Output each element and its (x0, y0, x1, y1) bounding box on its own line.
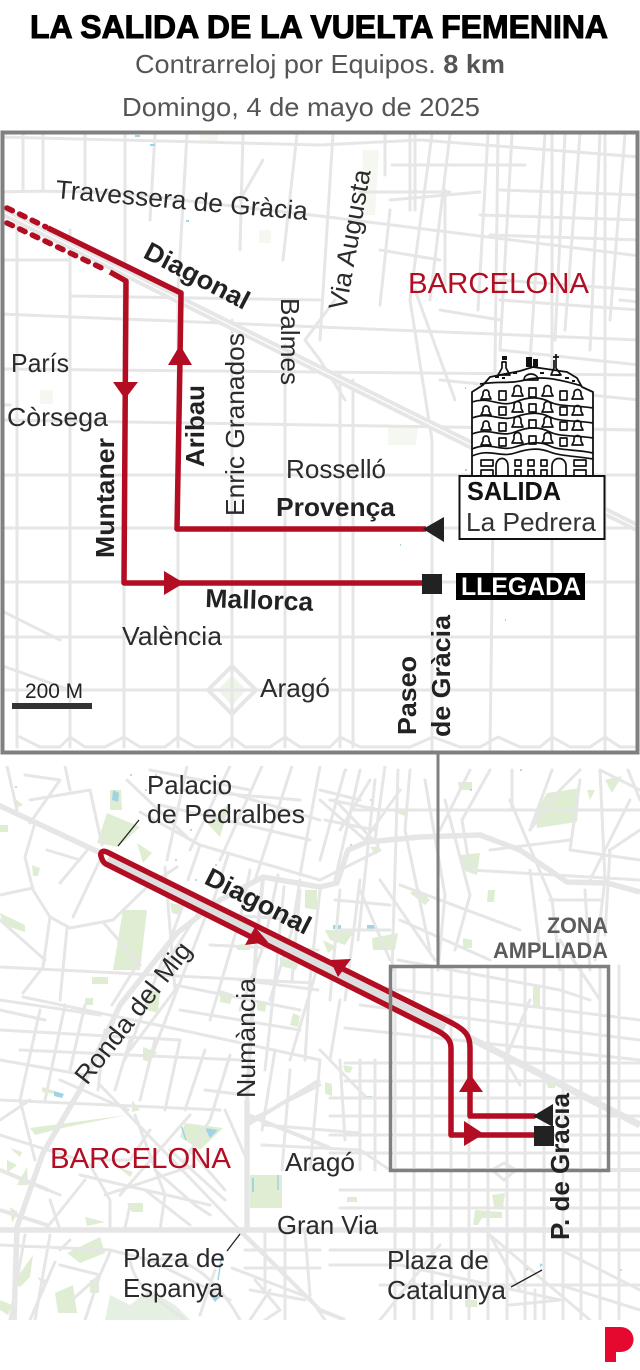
street labels: zoomed map: Provença (276, 492, 396, 522)
frame: zoomed map border (2, 132, 638, 752)
icon: finish square (422, 574, 442, 594)
arrow: Aribau direction (459, 1074, 483, 1092)
street labels: zoomed map: de Gràcia (426, 614, 456, 737)
street labels: zoomed map: Muntaner (90, 438, 120, 558)
arrow: return direction (330, 959, 351, 977)
arrow: Muntaner direction (113, 382, 138, 396)
arrow: start direction (533, 1104, 553, 1127)
street labels: overview map: Catalunya (387, 1275, 507, 1305)
route: return via Muntaner (7, 223, 442, 595)
arrow: Mallorca direction (164, 571, 180, 595)
street labels: overview map: Aragó (285, 1147, 355, 1177)
street labels: zoomed map: Mallorca (205, 583, 314, 617)
logo: P (605, 1327, 634, 1362)
callout: start La Pedrera (460, 476, 604, 539)
street labels: overview map: Palacio (147, 770, 232, 800)
arrow: Aribau direction (168, 349, 192, 365)
label: ZONA AMPLIADA: ZONA (547, 913, 608, 938)
route: overview loop (101, 851, 554, 1146)
street labels: zoomed map: Paseo (392, 656, 422, 735)
street labels: zoomed map: Aribau (180, 385, 210, 467)
map: street network (0, 766, 640, 1320)
panel: overview map (0, 753, 640, 1320)
scale bar: 200 m: 200 M (25, 680, 83, 703)
arrow: Mallorca direction (464, 1121, 484, 1146)
title: LA SALIDA DE LA VUELTA FEMENINA (30, 9, 608, 45)
street labels: zoomed map: BARCELONA (408, 268, 590, 300)
callout: finish LLEGADA: LLEGADA (461, 573, 581, 601)
street labels: zoomed map: València (122, 621, 223, 651)
street labels: overview map: de Pedralbes (147, 799, 305, 829)
street labels: overview map: P. de Gràcia (545, 1092, 575, 1240)
street labels: overview map: BARCELONA (50, 1143, 232, 1175)
arrow: start direction (423, 517, 444, 542)
street labels: zoomed map (7, 166, 590, 737)
street labels: zoomed map: Balmes (275, 298, 305, 385)
scale bar: 200 m (12, 680, 92, 709)
connector: zoom lines (436, 753, 440, 966)
street labels: zoomed map: Enric Granados (220, 333, 250, 516)
street labels: zoomed map: París (11, 348, 69, 378)
frame: zoomed area locator (390, 966, 608, 1170)
panel: zoomed route map (0, 132, 640, 753)
street labels: zoomed map: Rosselló (286, 454, 386, 484)
icon: La Pedrera building (472, 354, 593, 476)
street labels: zoomed map: Travessera de Gràcia (54, 174, 310, 226)
label: ZONA AMPLIADA (493, 913, 608, 963)
map: parks and water (0, 770, 638, 1320)
street labels: overview map: Gran Via (277, 1210, 379, 1240)
street labels: zoomed map: Còrsega (7, 402, 109, 432)
subtitle: date: Domingo, 4 de mayo de 2025 (122, 92, 480, 122)
street labels: overview map: Numància (231, 977, 261, 1098)
label: ZONA AMPLIADA: AMPLIADA (493, 938, 608, 963)
street labels: overview map: Ronda del Mig (68, 936, 198, 1090)
callout: start La Pedrera: SALIDA (467, 476, 561, 506)
street labels: zoomed map: Diagonal (139, 236, 255, 315)
street labels: overview map: Espanya (123, 1273, 224, 1303)
street labels: overview map (50, 770, 575, 1305)
callout: start La Pedrera: La Pedrera (466, 507, 597, 537)
subtitle: stage type and distance: Contrarreloj por Equipos. 8 km (135, 49, 505, 79)
arrow: outbound direction (245, 927, 268, 945)
route: exit via Aribau (7, 208, 444, 542)
street labels: zoomed map: Via Augusta (322, 166, 377, 312)
icon: finish square (534, 1126, 554, 1146)
street labels: overview map: Diagonal (200, 862, 316, 941)
map: zoomed street network (0, 132, 640, 753)
street labels: zoomed map: Aragó (260, 673, 330, 703)
street labels: overview map: Plaza de (387, 1245, 489, 1275)
street labels: overview map: Plaza de (123, 1243, 225, 1273)
